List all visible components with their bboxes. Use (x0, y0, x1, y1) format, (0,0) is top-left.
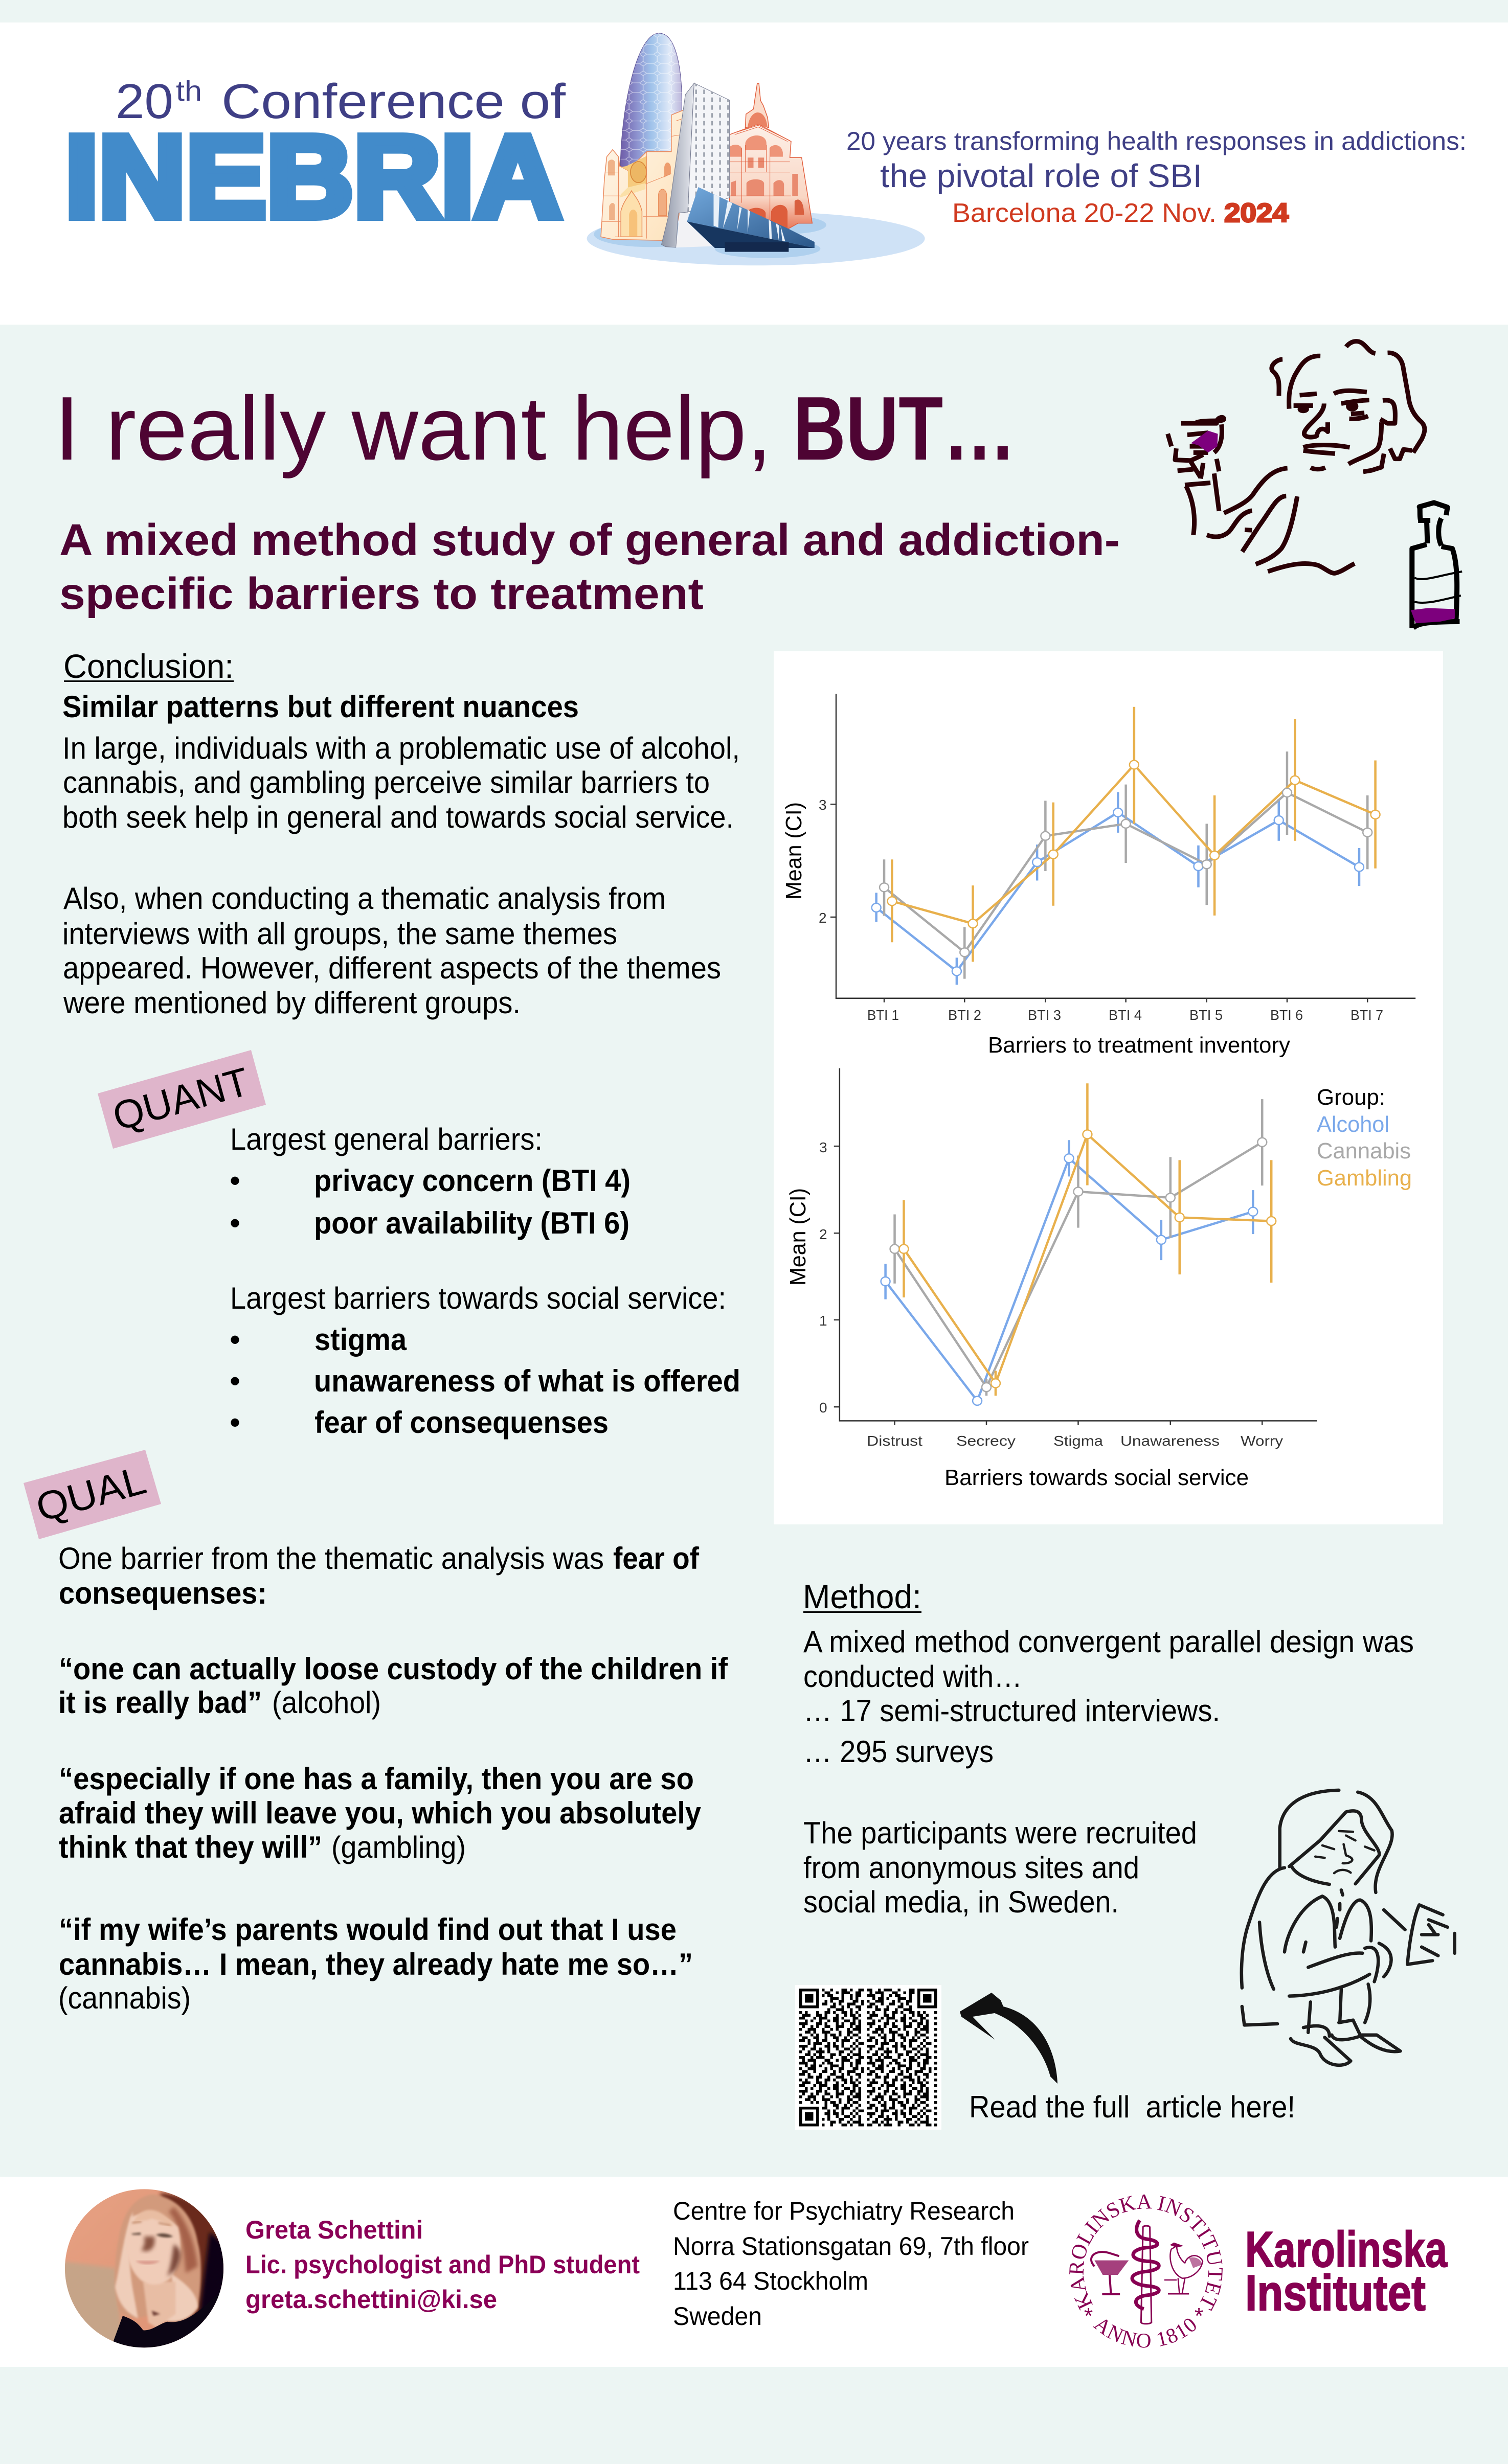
tagline (846, 127, 1467, 228)
legend: Cannabis (1317, 1138, 1411, 1163)
panel: quantitative barriers: • (230, 1364, 240, 1398)
panel: quantitative barriers (230, 1122, 740, 1440)
line chart: barriers to treatment inventory: 2 (819, 910, 827, 926)
panel: quantitative barriers: privacy concern (BTI 4) (314, 1163, 631, 1198)
legend: Group: (1317, 1085, 1385, 1110)
legend (1317, 1085, 1412, 1191)
line chart: barriers towards social service: Secrecy (956, 1433, 1016, 1449)
panel: quantitative barriers: • (230, 1206, 240, 1240)
panel: conclusion: were mentioned by different groups. (63, 986, 521, 1020)
Karolinska Institutet seal: * (1195, 2303, 1203, 2329)
line chart: barriers towards social service: Distrust (867, 1433, 922, 1449)
title: BUT… (793, 378, 1016, 479)
panel: method: … 295 surveys (803, 1735, 994, 1769)
panel: charts (774, 651, 1443, 1524)
panel: method: Method: (803, 1578, 921, 1615)
line chart: barriers towards social service: Worry (1241, 1433, 1283, 1449)
panel: qualitative quotes: (gambling) (331, 1830, 466, 1864)
author details: Greta Schettini (245, 2216, 423, 2244)
line chart: barriers towards social service: Mean (CI) (785, 1188, 811, 1286)
panel: quantitative barriers: unawareness of what is offered (314, 1364, 740, 1398)
INEBRIA logotype: INEBRIA (65, 112, 561, 242)
author photo (65, 2189, 223, 2347)
line chart: barriers to treatment inventory: BTI 3 (1028, 1007, 1061, 1023)
line chart: barriers to treatment inventory: BTI 4 (1109, 1007, 1142, 1023)
panel: method: A mixed method convergent parallel design was (803, 1625, 1414, 1659)
line chart: barriers towards social service: 1 (819, 1313, 827, 1329)
panel: qualitative quotes: “one can actually loose custody of the children if (59, 1652, 728, 1686)
Karolinska Institutet seal: KAROLINSKA INSTITUTET (1069, 2194, 1223, 2311)
panel: qualitative quotes: One barrier from the thematic analysis was (58, 1541, 604, 1576)
panel: method: conducted with… (803, 1659, 1022, 1694)
panel: conclusion (62, 647, 740, 1020)
author details: Lic. psychologist and PhD student (245, 2250, 640, 2279)
line chart: barriers towards social service: 3 (819, 1139, 827, 1155)
conference heading: Conference of (221, 74, 566, 129)
line chart: barriers towards social service (785, 1068, 1317, 1490)
address: Centre for Psychiatry Research (673, 2197, 1015, 2225)
panel: qualitative quotes: it is really bad” (58, 1685, 262, 1720)
line chart: barriers towards social service: Unawareness (1120, 1433, 1220, 1449)
call to action: Read the full article here! (969, 2090, 1295, 2124)
panel: qualitative quotes: “especially if one has a family, then you are so (59, 1762, 694, 1796)
panel: conclusion: cannabis, and gambling perceive similar barriers to (63, 765, 710, 800)
panel: qualitative quotes: “if my wife’s parents would find out that I use (59, 1912, 677, 1947)
panel: conclusion: Conclusion: (63, 647, 234, 685)
illustration: worried person holding a book (1242, 1790, 1455, 2065)
panel: qualitative quotes: fear of (613, 1541, 700, 1576)
author details (245, 2216, 640, 2314)
address: 113 64 Stockholm (673, 2267, 868, 2295)
panel: qualitative quotes: afraid they will leave you, which you absolutely (59, 1796, 702, 1830)
subtitle (59, 515, 1120, 619)
line chart: barriers to treatment inventory: 3 (819, 797, 827, 813)
panel: conclusion: interviews with all groups, the same themes (62, 917, 617, 951)
panel: qualitative quotes: consequenses: (59, 1576, 267, 1610)
line chart: barriers towards social service: 2 (819, 1226, 827, 1242)
tagline: 2024 (1224, 198, 1289, 228)
line chart: barriers to treatment inventory: BTI 6 (1270, 1007, 1303, 1023)
footer band (0, 2177, 1508, 2367)
panel: method: The participants were recruited (803, 1816, 1197, 1850)
QR code (795, 1985, 941, 2130)
line chart: barriers to treatment inventory: Barriers to treatment inventory (988, 1033, 1290, 1058)
author details: greta.schettini@ki.se (245, 2285, 497, 2314)
line chart: barriers towards social service: Barriers towards social service (944, 1465, 1249, 1490)
panel: quantitative barriers: Largest barriers towards social service: (230, 1281, 726, 1315)
panel: conclusion: Similar patterns but different nuances (62, 690, 579, 724)
conference heading: 20 (116, 74, 173, 129)
panel: method: … 17 semi-structured interviews. (803, 1694, 1220, 1728)
address: Sweden (673, 2302, 762, 2331)
line chart: barriers towards social service: Stigma (1053, 1433, 1103, 1449)
panel: conclusion: both seek help in general and towards social service. (62, 800, 734, 834)
conference heading (116, 74, 566, 129)
panel: qualitative quotes: cannabis… I mean, they already hate me so…” (59, 1947, 693, 1981)
tagline: Barcelona 20-22 Nov. (952, 198, 1217, 228)
QUAL tag (24, 1450, 161, 1539)
line chart: barriers to treatment inventory: Mean (CI) (781, 802, 806, 900)
panel: conclusion: In large, individuals with a problematic use of alcohol, (62, 731, 740, 765)
header band (0, 22, 1508, 325)
panel: qualitative quotes (58, 1541, 728, 2015)
panel: qualitative quotes: (alcohol) (272, 1685, 381, 1720)
panel: conclusion: Also, when conducting a thematic analysis from (63, 881, 666, 916)
address (673, 2197, 1029, 2331)
panel: qualitative quotes: think that they will” (59, 1830, 322, 1864)
title: I really want help, (54, 378, 772, 479)
panel: conclusion: appeared. However, different aspects of the themes (63, 951, 721, 985)
conference heading: th (176, 75, 202, 107)
panel: quantitative barriers: Largest general barriers: (230, 1122, 543, 1156)
QUAL tag: QUAL (31, 1457, 151, 1530)
subtitle: A mixed method study of general and addiction- (59, 515, 1120, 565)
panel: quantitative barriers: • (230, 1322, 240, 1357)
panel: quantitative barriers: stigma (314, 1322, 407, 1357)
line chart: barriers to treatment inventory: BTI 1 (867, 1007, 899, 1023)
subtitle: specific barriers to treatment (59, 569, 704, 619)
panel: quantitative barriers: • (230, 1405, 240, 1440)
Karolinska Institutet seal: * (1084, 2303, 1093, 2329)
Karolinska Institutet seal: ANNO 1810 (1093, 2319, 1196, 2347)
panel: quantitative barriers: poor availability (BTI 6) (314, 1206, 629, 1240)
panel: quantitative barriers: • (230, 1163, 240, 1198)
panel: quantitative barriers: fear of consequenses (314, 1405, 609, 1440)
legend: Gambling (1317, 1166, 1412, 1191)
arrow pointing to QR code (960, 1993, 1057, 2084)
panel: method: social media, in Sweden. (803, 1885, 1119, 1919)
tagline: the pivotal role of SBI (880, 157, 1202, 194)
line chart: barriers to treatment inventory: BTI 5 (1189, 1007, 1223, 1023)
Karolinska Institutet wordmark: Karolinska (1245, 2221, 1448, 2277)
illustration: woman with wine glass and bottle (1168, 341, 1462, 628)
line chart: barriers towards social service: 0 (819, 1400, 827, 1416)
legend: Alcohol (1317, 1112, 1389, 1137)
address: Norra Stationsgatan 69, 7th floor (673, 2232, 1029, 2261)
line chart: barriers to treatment inventory (781, 694, 1415, 1058)
line chart: barriers to treatment inventory: BTI 7 (1351, 1007, 1383, 1023)
illustration: Barcelona buildings (587, 33, 925, 265)
Karolinska Institutet wordmark (1245, 2221, 1448, 2321)
line chart: barriers to treatment inventory: BTI 2 (948, 1007, 981, 1023)
panel: qualitative quotes: (cannabis) (58, 1981, 191, 2015)
panel: method (803, 1578, 1414, 1919)
QUANT tag: QUANT (108, 1059, 254, 1139)
tagline: 20 years transforming health responses in addictions: (846, 127, 1467, 155)
Karolinska Institutet wordmark: Institutet (1245, 2265, 1426, 2321)
panel: method: from anonymous sites and (803, 1851, 1139, 1885)
